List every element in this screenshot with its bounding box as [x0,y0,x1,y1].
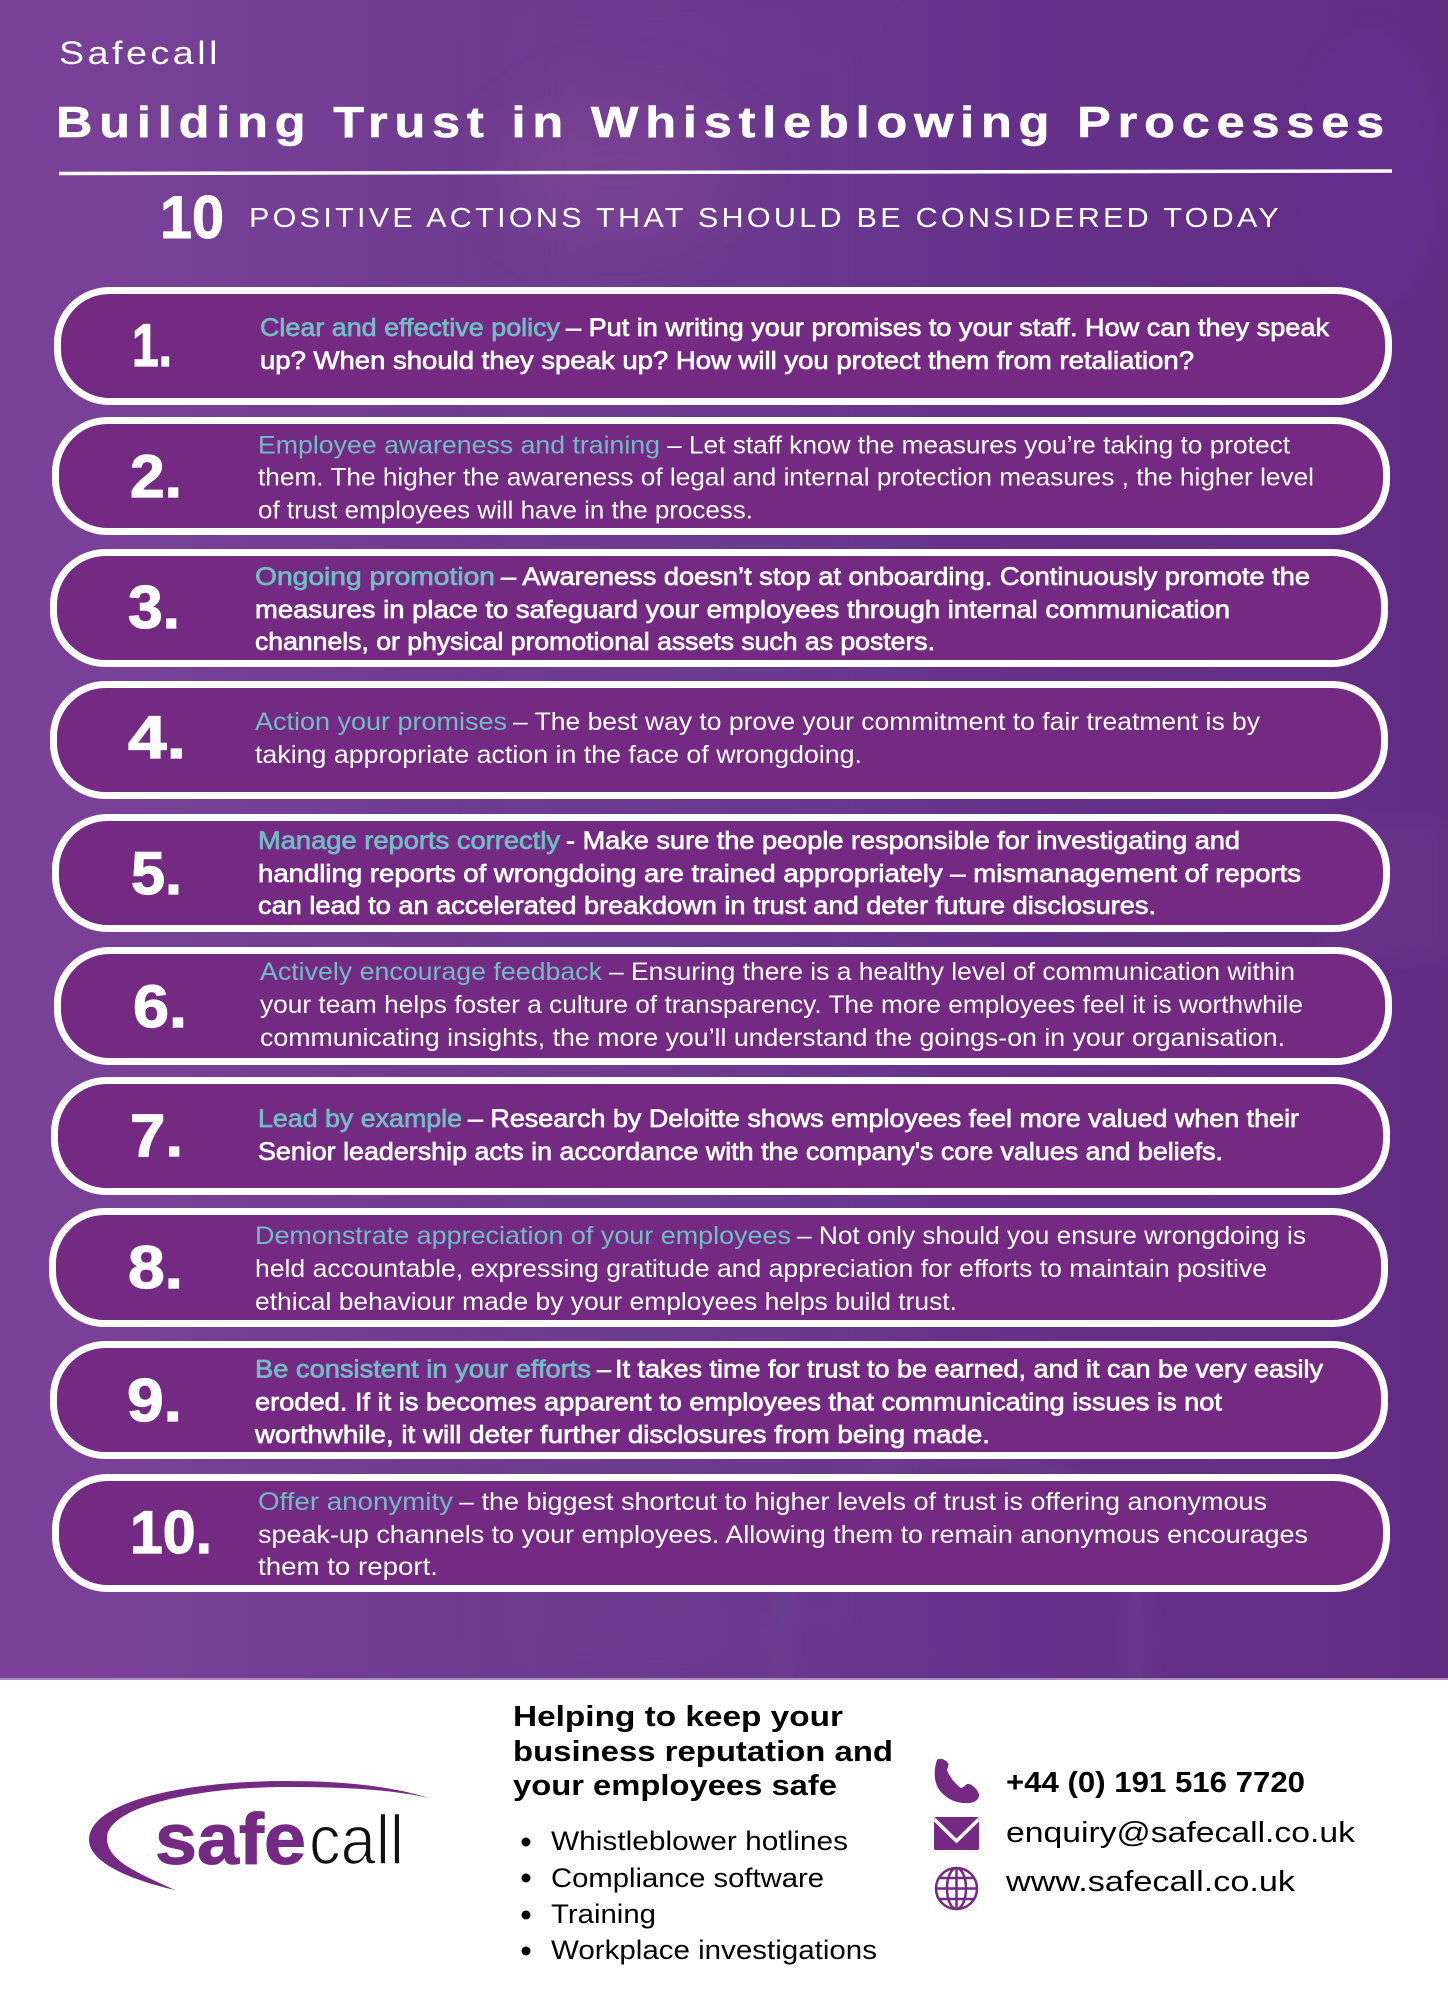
pill [54,1344,1384,1456]
panel: action 9 [54,1344,1384,1456]
logo wordmark call: call [309,1801,404,1879]
tagline heading: Helping to keep your [513,1701,843,1733]
panel: action 1 [58,290,1388,402]
body text: – Let staff know the measures you’re taking to protect [667,432,1290,460]
body text: ethical behaviour made by your employees helps build trust. [255,1288,957,1316]
body text: handling reports of wrongdoing are trained appropriately – mismanagement of reports [258,860,1301,888]
pill [56,420,1386,532]
subtitle text: POSITIVE ACTIONS THAT SHOULD BE CONSIDERED TODAY [249,202,1282,233]
number: 3. [128,574,180,641]
services list: Workplace investigations [551,1935,877,1965]
logo: safecall [89,1781,429,1890]
services list: Whistleblower hotlines [551,1826,848,1856]
icon: globe [936,1868,977,1909]
number ten: 10 [160,184,224,251]
pill [56,1478,1386,1588]
heading: Clear and effective policy [260,314,561,342]
footer background [0,1680,1448,2000]
number: 5. [131,840,182,907]
number: 1. [132,312,172,379]
panel: action 2 [56,420,1386,532]
pill [54,684,1384,796]
panel: action 6 [58,950,1388,1062]
body text: them. The higher the awareness of legal and internal protection measures , the higher level [258,464,1314,492]
title: Building Trust in Whistleblowing Processes [56,98,1391,147]
panel: action 8 [52,1212,1384,1324]
number: 9. [127,1367,182,1434]
logo wordmark safe: safe [155,1800,306,1880]
pill [56,818,1386,928]
panel: action 4 [54,684,1384,796]
title rule [59,171,1392,174]
body text: up? When should they speak up? How will you protect them from retaliation? [260,347,1194,375]
number: 4. [128,704,186,771]
body text: eroded. If it is becomes apparent to employees that communicating issues is not [255,1388,1222,1416]
body text: taking appropriate action in the face of wrongdoing. [255,741,862,769]
body text: worthwhile, it will deter further disclosures from being made. [254,1421,990,1449]
body text: – the biggest shortcut to higher levels of trust is offering anonymous [459,1488,1267,1516]
pill [58,950,1388,1062]
tagline heading: your employees safe [513,1770,837,1802]
body text: channels, or physical promotional assets such as posters. [255,628,935,656]
body text: them to report. [258,1553,438,1581]
pill [54,552,1384,664]
heading: Offer anonymity [258,1488,454,1516]
heading: Employee awareness and training [258,432,660,460]
dash: – [597,1356,611,1384]
number: 6. [133,973,187,1040]
body text: – Awareness doesn’t stop at onboarding. Continuously promote the [501,563,1310,591]
body text: - Make sure the people responsible for investigating and [566,827,1240,855]
number: 7. [130,1102,183,1169]
body text: speak-up channels to your employees. Allowing them to remain anonymous encourages [258,1521,1308,1549]
body text: It takes time for trust to be earned, and it can be very easily [615,1356,1324,1384]
email address: enquiry@safecall.co.uk [1006,1817,1356,1849]
panel: action 7 [54,1080,1386,1192]
services list: Compliance software [551,1863,824,1893]
body text: of trust employees will have in the process. [258,496,753,524]
body text: measures in place to safeguard your employees through internal communication [255,596,1230,624]
panel: action 5 [56,818,1386,928]
phone number: +44 (0) 191 516 7720 [1006,1767,1305,1799]
heading: Demonstrate appreciation of your employees [255,1222,791,1250]
brand name: Safecall [59,35,221,71]
services list [522,1826,877,1965]
logo swoosh [89,1781,429,1890]
heading: Lead by example [258,1105,462,1133]
pill [58,290,1388,402]
icon: envelope [934,1817,979,1850]
panel: action 10 [56,1478,1386,1588]
number: 2. [130,443,182,510]
body text: – Ensuring there is a healthy level of communication within [609,958,1295,986]
body text: communicating insights, the more you’ll understand the goings-on in your organisation. [260,1024,1285,1052]
number: 8. [128,1234,183,1301]
body text: your team helps foster a culture of transparency. The more employees feel it is worthwhile [260,991,1303,1019]
pill [54,1080,1386,1192]
heading: Be consistent in your efforts [255,1356,591,1384]
heading: Actively encourage feedback [260,958,603,986]
icon: phone [935,1759,979,1803]
body text: Senior leadership acts in accordance with the company's core values and beliefs. [258,1138,1223,1166]
body text: – Not only should you ensure wrongdoing is [797,1222,1306,1250]
body text: – Research by Deloitte shows employees feel more valued when their [468,1105,1299,1133]
subtitle [160,184,1282,251]
panel: action 3 [54,552,1384,664]
services list: Training [551,1899,656,1929]
body text: held accountable, expressing gratitude and appreciation for efforts to maintain positive [255,1255,1267,1283]
pill [52,1212,1384,1324]
tagline heading: business reputation and [513,1736,893,1768]
website address: www.safecall.co.uk [1005,1866,1296,1898]
heading: Manage reports correctly [258,827,561,855]
body text: can lead to an accelerated breakdown in trust and deter future disclosures. [258,892,1156,920]
body text: – Put in writing your promises to your staff. How can they speak [566,314,1330,342]
number: 10. [130,1499,212,1566]
heading: Action your promises [255,708,507,736]
body text: – The best way to prove your commitment to fair treatment is by [513,708,1261,736]
heading: Ongoing promotion [255,563,495,591]
